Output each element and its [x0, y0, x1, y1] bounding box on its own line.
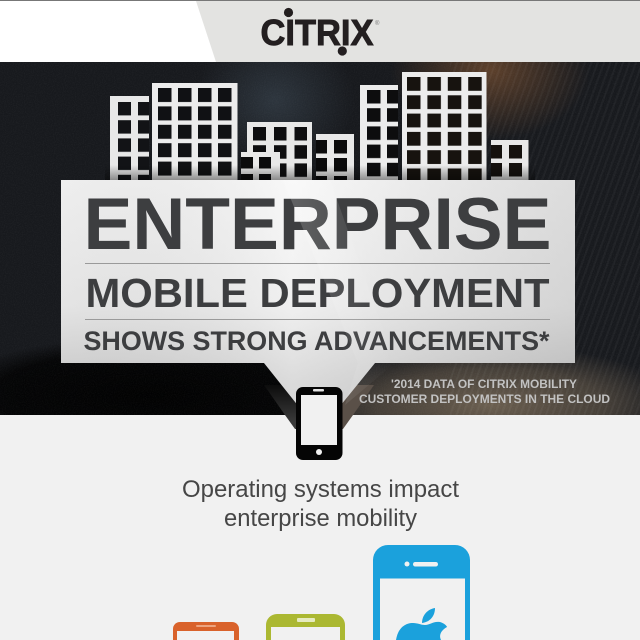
subtitle	[182, 476, 459, 532]
icon: black smartphone	[296, 387, 342, 460]
header band	[0, 0, 640, 62]
icon: blue apple phone	[373, 545, 470, 640]
subtitle: Operating systems impact	[182, 476, 459, 503]
building 6	[360, 85, 398, 180]
heading: mobile deployment: MOBILE DEPLOYMENT	[86, 270, 550, 316]
building 5	[316, 134, 354, 180]
building 1	[110, 96, 149, 180]
subtitle: enterprise mobility	[224, 505, 417, 532]
hero background	[0, 62, 640, 415]
icon: green phone	[266, 614, 345, 640]
skyline buildings	[110, 72, 528, 180]
building 2	[152, 83, 238, 180]
icon: orange phone	[173, 622, 239, 640]
building 3	[247, 122, 312, 180]
building base fade	[105, 165, 535, 180]
Citrix logo: CITRIX	[260, 12, 374, 53]
building 4 front	[241, 152, 280, 180]
pointer shadow left	[264, 385, 319, 429]
apple logo	[396, 608, 447, 640]
building 7	[402, 72, 486, 180]
footnote: '2014 DATA OF CITRIX MOBILITY	[391, 377, 577, 391]
title banner	[61, 180, 575, 432]
Citrix logo: ®	[375, 20, 380, 27]
pointer shadow right	[319, 385, 374, 429]
footnote: CUSTOMER DEPLOYMENTS IN THE CLOUD	[359, 392, 610, 406]
footnote	[359, 377, 610, 406]
building 8	[491, 140, 528, 180]
heading: enterprise: ENTERPRISE	[84, 184, 552, 265]
heading: shows strong advancements: SHOWS STRONG ADVANCEMENTS*	[84, 326, 550, 356]
